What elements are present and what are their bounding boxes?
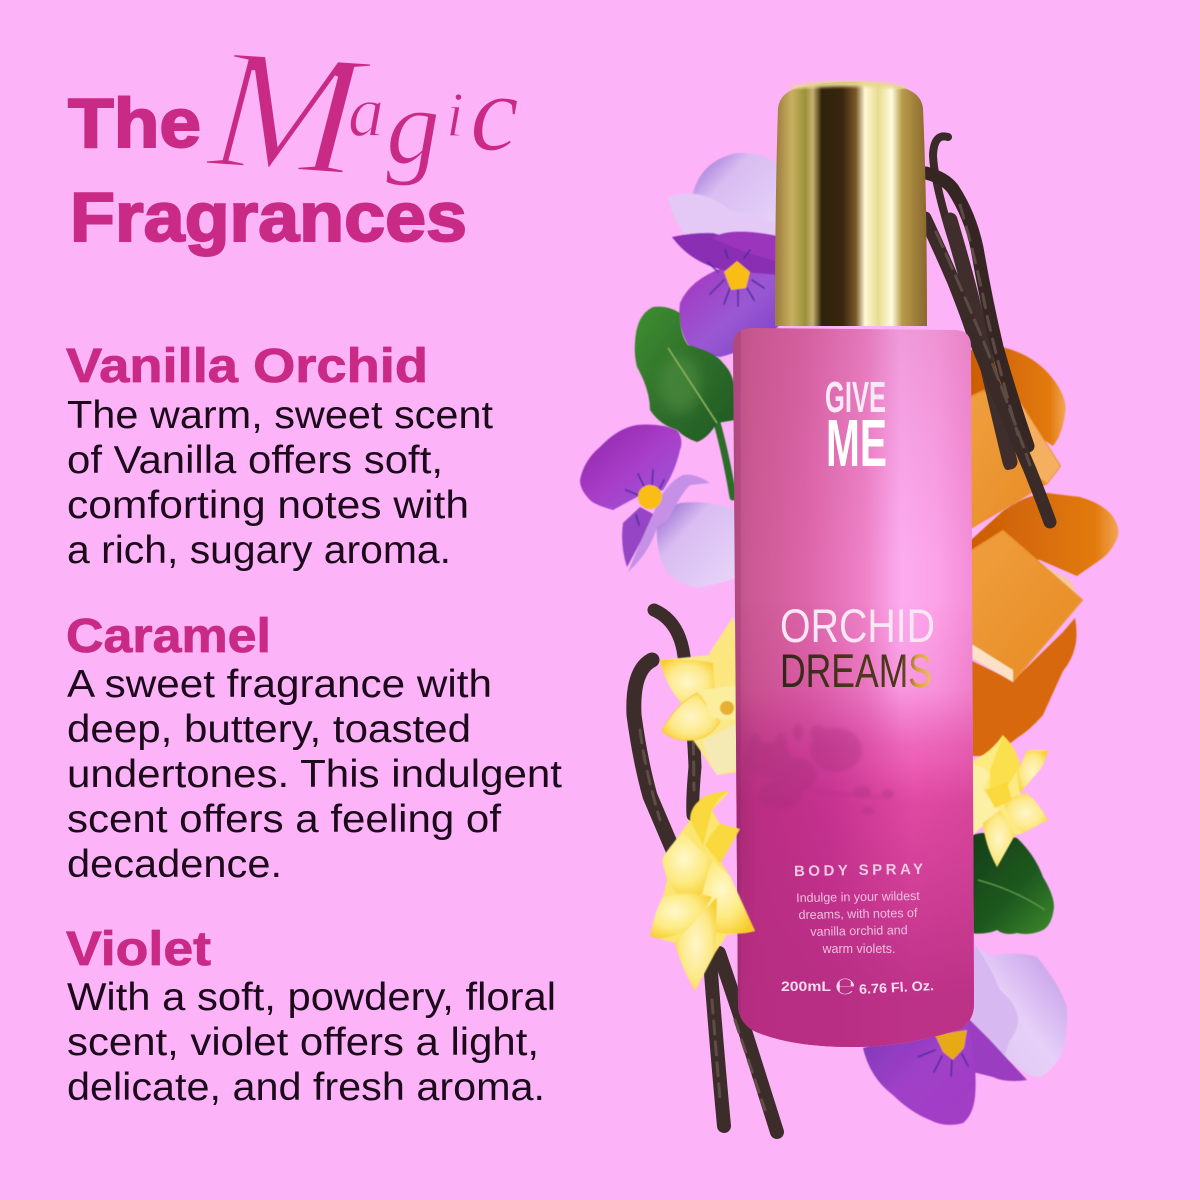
text: Violet description: With a soft, powdery, floral (67, 976, 556, 1019)
text: Violet description: delicate, and fresh aroma. (67, 1066, 545, 1109)
section: Violet (66, 923, 556, 1109)
icon: violet top (668, 153, 778, 357)
label: description (796, 889, 920, 956)
icon: violet bottom (863, 943, 1067, 1125)
title word: Magic script (201, 12, 519, 213)
heading: Violet: Violet (66, 923, 211, 976)
text: Caramel description: deep, buttery, toasted (67, 708, 471, 751)
text: Violet description (67, 976, 556, 1109)
title word: Magic script: g (386, 68, 440, 187)
bottle (725, 82, 985, 1055)
icon: vanilla flower right (962, 735, 1048, 867)
violet centre (638, 485, 662, 509)
title word: Magic script: c (470, 52, 519, 174)
violet rays (626, 470, 664, 525)
product name: ORCHID DREAMS (780, 599, 935, 697)
title word: The: The (68, 84, 201, 162)
label: volume: 6.76 Fl. Oz. (859, 978, 934, 997)
section: Vanilla Orchid (66, 340, 493, 572)
icon: vanilla pods upper right (925, 136, 1050, 522)
brand: GIVE ME: GIVE (825, 373, 886, 422)
flower centre (720, 701, 734, 715)
text: Vanilla Orchid description: The warm, sweet scent (67, 394, 493, 437)
icon: violet left (580, 425, 736, 588)
label: description: dreams, with notes of (798, 906, 918, 922)
text: Caramel description: A sweet fragrance with (67, 663, 492, 706)
orchid watermark (744, 724, 894, 815)
heading: Caramel: Caramel (66, 610, 271, 663)
label: volume: ℮ (835, 972, 856, 1000)
label: description: warm violets. (822, 942, 895, 956)
text: Vanilla Orchid description: of Vanilla offers soft, (67, 439, 443, 482)
label: description: Indulge in your wildest (796, 889, 920, 905)
title word: Magic script: M (201, 12, 376, 213)
brand: GIVE ME (825, 373, 887, 481)
icon: vanilla flower lower (650, 791, 755, 991)
heading: Vanilla Orchid: Vanilla Orchid (66, 340, 428, 393)
bottle body (725, 320, 985, 1055)
title word: Magic script: i (446, 79, 464, 150)
violet centre (724, 261, 750, 290)
label: description: vanilla orchid and (810, 923, 908, 939)
violet rays (918, 1050, 968, 1076)
title word: Magic script: a (348, 72, 384, 152)
infographic canvas (66, 55, 1120, 1139)
label: BODY SPRAY: BODY SPRAY (794, 861, 923, 880)
title (68, 12, 519, 256)
label: volume (781, 972, 934, 1000)
icon: caramel pieces (960, 347, 1118, 756)
product name: ORCHID DREAMS: DREAMS (780, 644, 932, 697)
text: Vanilla Orchid description: comforting notes with (67, 484, 469, 527)
text: Vanilla Orchid description: a rich, sugary aroma. (67, 529, 451, 572)
text: Caramel description: undertones. This indulgent (67, 753, 562, 796)
text: Vanilla Orchid description (67, 394, 493, 572)
text: Caramel description (67, 663, 562, 886)
text: Caramel description: decadence. (67, 843, 282, 886)
violet centre (935, 1030, 967, 1060)
icon: vanilla pods lower left (634, 610, 777, 1132)
icon: green leaf left (635, 307, 735, 497)
title word: Fragrances: Fragrances (70, 178, 467, 256)
product name: ORCHID DREAMS: ORCHID (780, 599, 935, 652)
violet dark rays (708, 250, 764, 306)
text: Violet description: scent, violet offers a light, (67, 1021, 539, 1064)
icon: green leaf right (960, 833, 1054, 934)
bottle cap (775, 82, 927, 326)
label: volume: 200mL (781, 979, 831, 994)
icon: vanilla flower upper (660, 617, 740, 775)
text: Caramel description: scent offers a feeling of (67, 798, 501, 841)
section: Caramel (66, 610, 562, 886)
brand: GIVE ME: ME (826, 406, 887, 481)
